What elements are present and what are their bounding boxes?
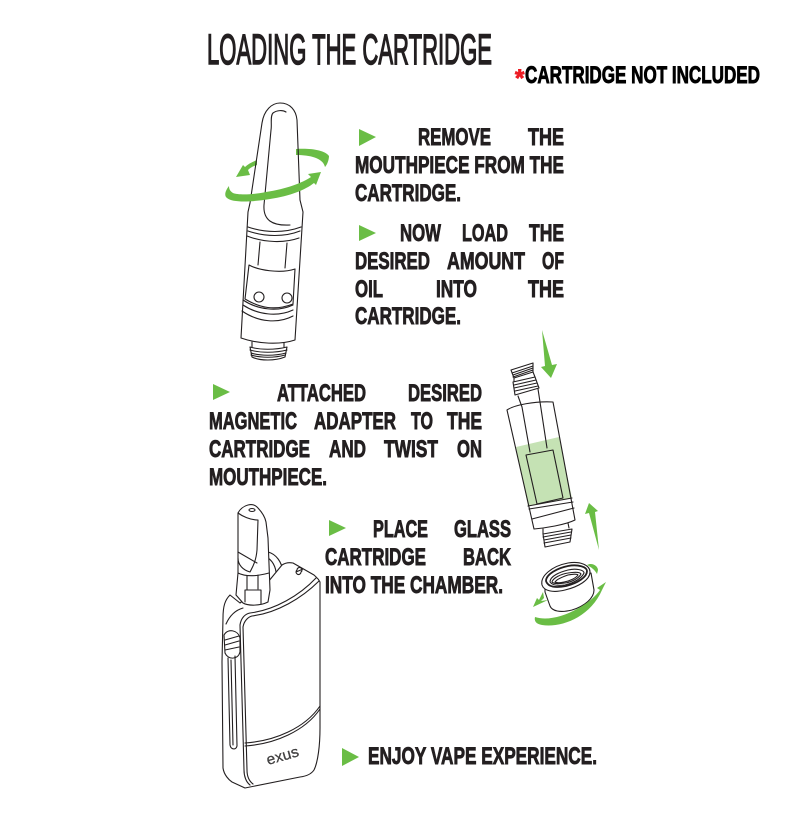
step: load oil: NOW: [400, 220, 442, 247]
step: load oil: OIL: [355, 276, 383, 303]
arrow: down: [541, 330, 557, 378]
mouthpiece and cartridge: [236, 505, 270, 605]
step: attach magnetic adapter: MAGNETIC: [209, 408, 297, 435]
step: enjoy: [342, 743, 597, 770]
step: load oil: THE: [529, 220, 564, 247]
step: place glass cartridge: PLACE: [373, 516, 428, 543]
power button: [296, 568, 303, 574]
step: attach magnetic adapter: [209, 380, 482, 491]
magnetic adapter: [542, 562, 594, 611]
step: load oil: AMOUNT: [447, 248, 525, 275]
step: attach magnetic adapter: THE: [447, 408, 482, 435]
step: attach magnetic adapter: AND: [329, 436, 366, 463]
step: load oil: [355, 220, 564, 330]
step: remove the mouthpiece: [355, 124, 564, 207]
arrow bullet: [329, 520, 346, 536]
step: load oil: LOAD: [462, 220, 508, 247]
arrow bullet: [213, 384, 230, 400]
step: attach magnetic adapter: MOUTHPIECE.: [209, 464, 327, 491]
back mount: [268, 552, 284, 586]
step: place glass cartridge: CARTRIDGE: [325, 544, 426, 571]
arrow: rotate front: [225, 172, 321, 202]
note: cartridge not included: *: [515, 65, 525, 92]
oil fill: [516, 437, 572, 506]
step: remove the mouthpiece: MOUTHPIECE FROM THE: [355, 152, 564, 179]
arrow: up: [585, 503, 599, 550]
step: place glass cartridge: GLASS: [454, 516, 511, 543]
step: attach magnetic adapter: CARTRIDGE: [209, 436, 310, 463]
step: attach magnetic adapter: ADAPTER: [314, 408, 396, 435]
step: attach magnetic adapter: ON: [457, 436, 482, 463]
title: LOADING THE CARTRIDGE: [207, 26, 492, 74]
illustration: filled cartridge with adapter: [507, 330, 606, 626]
illustration: vape device: [222, 505, 320, 788]
step: attach magnetic adapter: TWIST: [384, 436, 438, 463]
logo: exus: [264, 743, 301, 769]
arrow: adapter rotation: [533, 564, 606, 626]
step: place glass cartridge: INTO THE CHAMBER.: [325, 572, 503, 599]
step: remove the mouthpiece: CARTRIDGE.: [355, 180, 461, 207]
step: place glass cartridge: BACK: [463, 544, 511, 571]
step: load oil: THE: [528, 276, 564, 303]
step: attach magnetic adapter: TO: [411, 408, 433, 435]
step: load oil: CARTRIDGE.: [355, 303, 461, 330]
slider: [224, 631, 240, 658]
step: place glass cartridge: [325, 516, 511, 599]
step: load oil: DESIRED: [355, 248, 430, 275]
step: load oil: OF: [542, 248, 564, 275]
step: attach magnetic adapter: DESIRED: [408, 380, 482, 407]
step: attach magnetic adapter: ATTACHED: [277, 380, 366, 407]
step: remove the mouthpiece: REMOVE: [418, 124, 491, 151]
arrow bullet: [359, 129, 376, 146]
device body: [222, 563, 320, 788]
step: enjoy: ENJOY VAPE EXPERIENCE.: [368, 743, 597, 770]
arrow bullet: [359, 225, 376, 241]
step: load oil: INTO: [436, 276, 477, 303]
step: remove the mouthpiece: THE: [528, 124, 564, 151]
arrow: rotate back: [236, 149, 329, 177]
illustration: cartridge with mouthpiece twist: [225, 103, 329, 360]
arrow bullet: [342, 748, 359, 766]
